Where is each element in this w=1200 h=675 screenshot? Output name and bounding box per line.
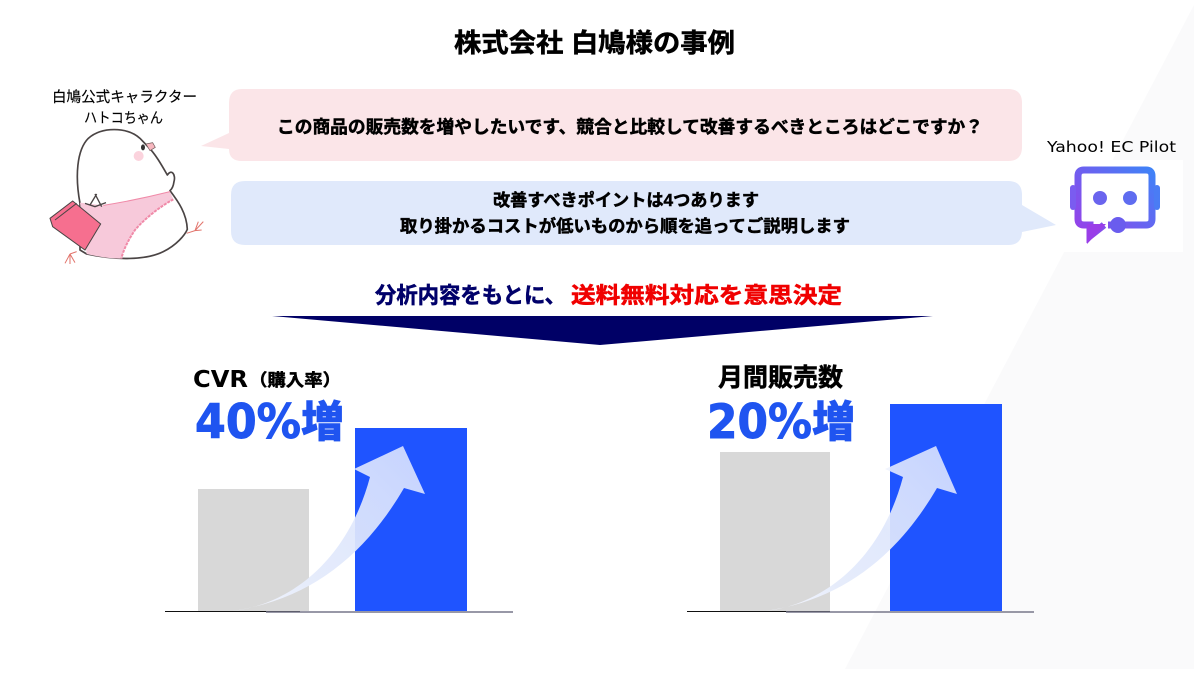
chart: CVR 40% increase [165,367,513,612]
character label: 白鳩公式キャラクター [52,89,197,106]
CVR label [193,367,341,393]
character label: ハトコちゃん [84,110,163,127]
character label [52,89,197,127]
before bar [198,489,309,611]
CVR value: 40% [195,395,301,450]
CVR value [195,388,344,450]
CVR label: CVR [193,367,248,393]
before bar [720,452,830,611]
monthly sales label: 月間販売数 [718,364,843,392]
speech bubble: AI answer: 改善すべきポイントは4つあります [493,190,759,210]
heading: decision: 分析内容をもとに、 [375,283,566,308]
heading: decision: 送料無料対応を意思決定 [571,283,842,308]
growth arrow [765,446,957,611]
icon: pigeon mascot Hatoko with shopping bag [50,130,203,264]
after bar [890,404,1002,611]
icon: Yahoo! EC Pilot chatbot: Yahoo! EC Pilot [1046,138,1176,156]
chart: monthly sales 20% increase [687,364,1034,612]
speech bubble: AI answer [231,181,1056,245]
monthly sales value: 増 [812,388,855,450]
speech bubble: AI answer: 取り掛かるコストが低いものから順を追ってご説明します [400,216,850,236]
growth arrow [232,446,425,611]
after bar [355,428,467,611]
heading: decision [375,283,842,308]
monthly sales value [707,388,855,450]
axis [165,610,513,613]
CVR value: 増 [301,388,344,450]
speech bubble: user question: この商品の販売数を増やしたいです、競合と比較して改善するべきところはどこですか？ [277,117,983,137]
monthly sales value: 20% [707,395,812,450]
icon: Yahoo! EC Pilot chatbot [1046,138,1183,252]
title: 株式会社 白鳩様の事例 [454,28,735,58]
speech bubble: user question [201,89,1022,161]
arrow: downward navy triangle [272,316,933,345]
background diagonal panel [845,5,1194,669]
CVR label: （購入率） [249,371,341,390]
axis [687,610,1034,613]
